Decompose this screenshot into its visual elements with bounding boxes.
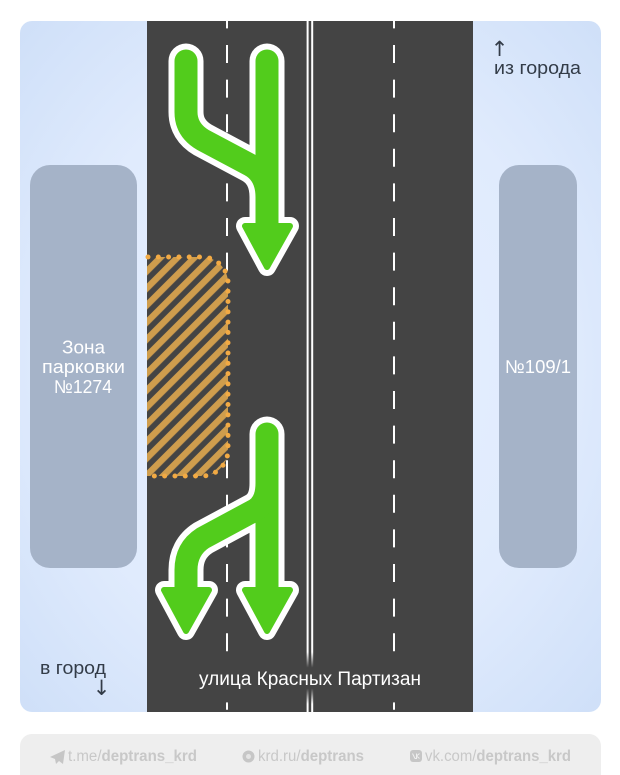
label: to the city: в город [40, 657, 106, 678]
panel: parking zone left: Зона [62, 336, 106, 358]
panel: parking zone left [30, 165, 137, 568]
hatched no-parking area [147, 257, 228, 476]
panel: parking zone left: №1274 [54, 376, 112, 397]
link: telegram: t.me/deptrans_krd [68, 748, 197, 765]
street name: улица Красных Партизан [199, 669, 421, 690]
label: from the city: ↑ [491, 37, 508, 61]
icon: globe [242, 750, 254, 762]
road [147, 21, 473, 712]
icon: vk [410, 750, 422, 762]
label: to the city [40, 657, 110, 700]
panel: footer links [20, 734, 601, 775]
link: vk: vk.com/deptrans_krd [425, 748, 571, 765]
link: website: krd.ru/deptrans [258, 748, 364, 765]
arrow: upper lanes merge [186, 61, 290, 267]
panel: parking zone left: парковки [42, 356, 125, 377]
panel: building 109/1: №109/1 [505, 356, 571, 377]
label: to the city: ↓ [93, 676, 110, 700]
icon: telegram [50, 750, 65, 764]
label: from the city: из города [494, 57, 582, 78]
arrow: lower lane splits [164, 434, 290, 631]
panel: building 109/1 [499, 165, 577, 568]
label: from the city [491, 37, 582, 78]
